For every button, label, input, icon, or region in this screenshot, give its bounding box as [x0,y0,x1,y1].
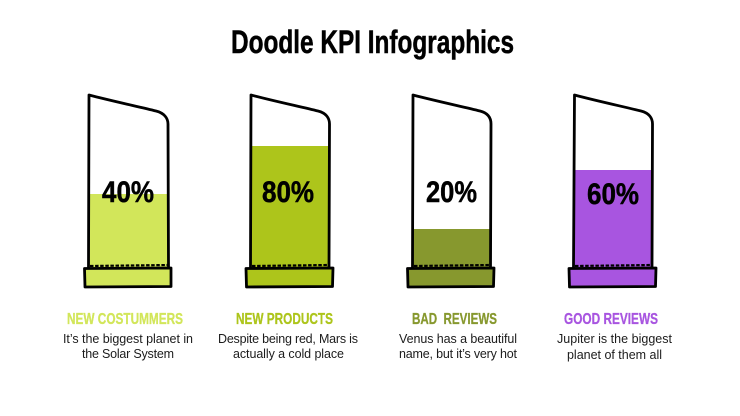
heading: NEW PRODUCTS [236,311,333,328]
hatched band [252,265,329,266]
heading: BAD REVIEWS [412,311,497,328]
title: Doodle KPI Infographics [231,24,514,60]
hatched band [575,265,652,266]
tube fill 80% [251,146,329,268]
tube fill 20% [413,229,491,268]
value: 60% [587,178,639,211]
description: actually a cold place [233,347,344,361]
value: 80% [262,176,314,209]
value: 40% [102,176,154,209]
panel: bad reviews [399,95,518,361]
heading: GOOD REVIEWS [564,311,658,328]
base [569,268,656,287]
description: Jupiter is the biggest [557,332,673,346]
tube fill 60% [574,170,652,268]
base [84,268,171,287]
heading: NEW COSTUMMERS [67,311,183,328]
tube outline [574,95,652,268]
description: It’s the biggest planet in [63,332,193,346]
hatched band [414,265,490,266]
description: Despite being red, Mars is [218,332,358,346]
tube outline [250,95,330,268]
hatched band [90,265,168,266]
description: name, but it’s very hot [399,347,518,361]
tube fill 40% [89,194,168,268]
description: Venus has a beautiful [399,332,517,346]
panel: new costummers [63,95,193,361]
panel: new products [218,95,358,361]
value: 20% [426,176,477,209]
description: the Solar System [82,347,174,361]
tube outline [412,95,491,268]
description: planet of them all [567,348,662,362]
base [246,268,333,287]
tube outline [88,95,168,268]
base [408,268,494,287]
panel: good reviews [557,95,673,362]
